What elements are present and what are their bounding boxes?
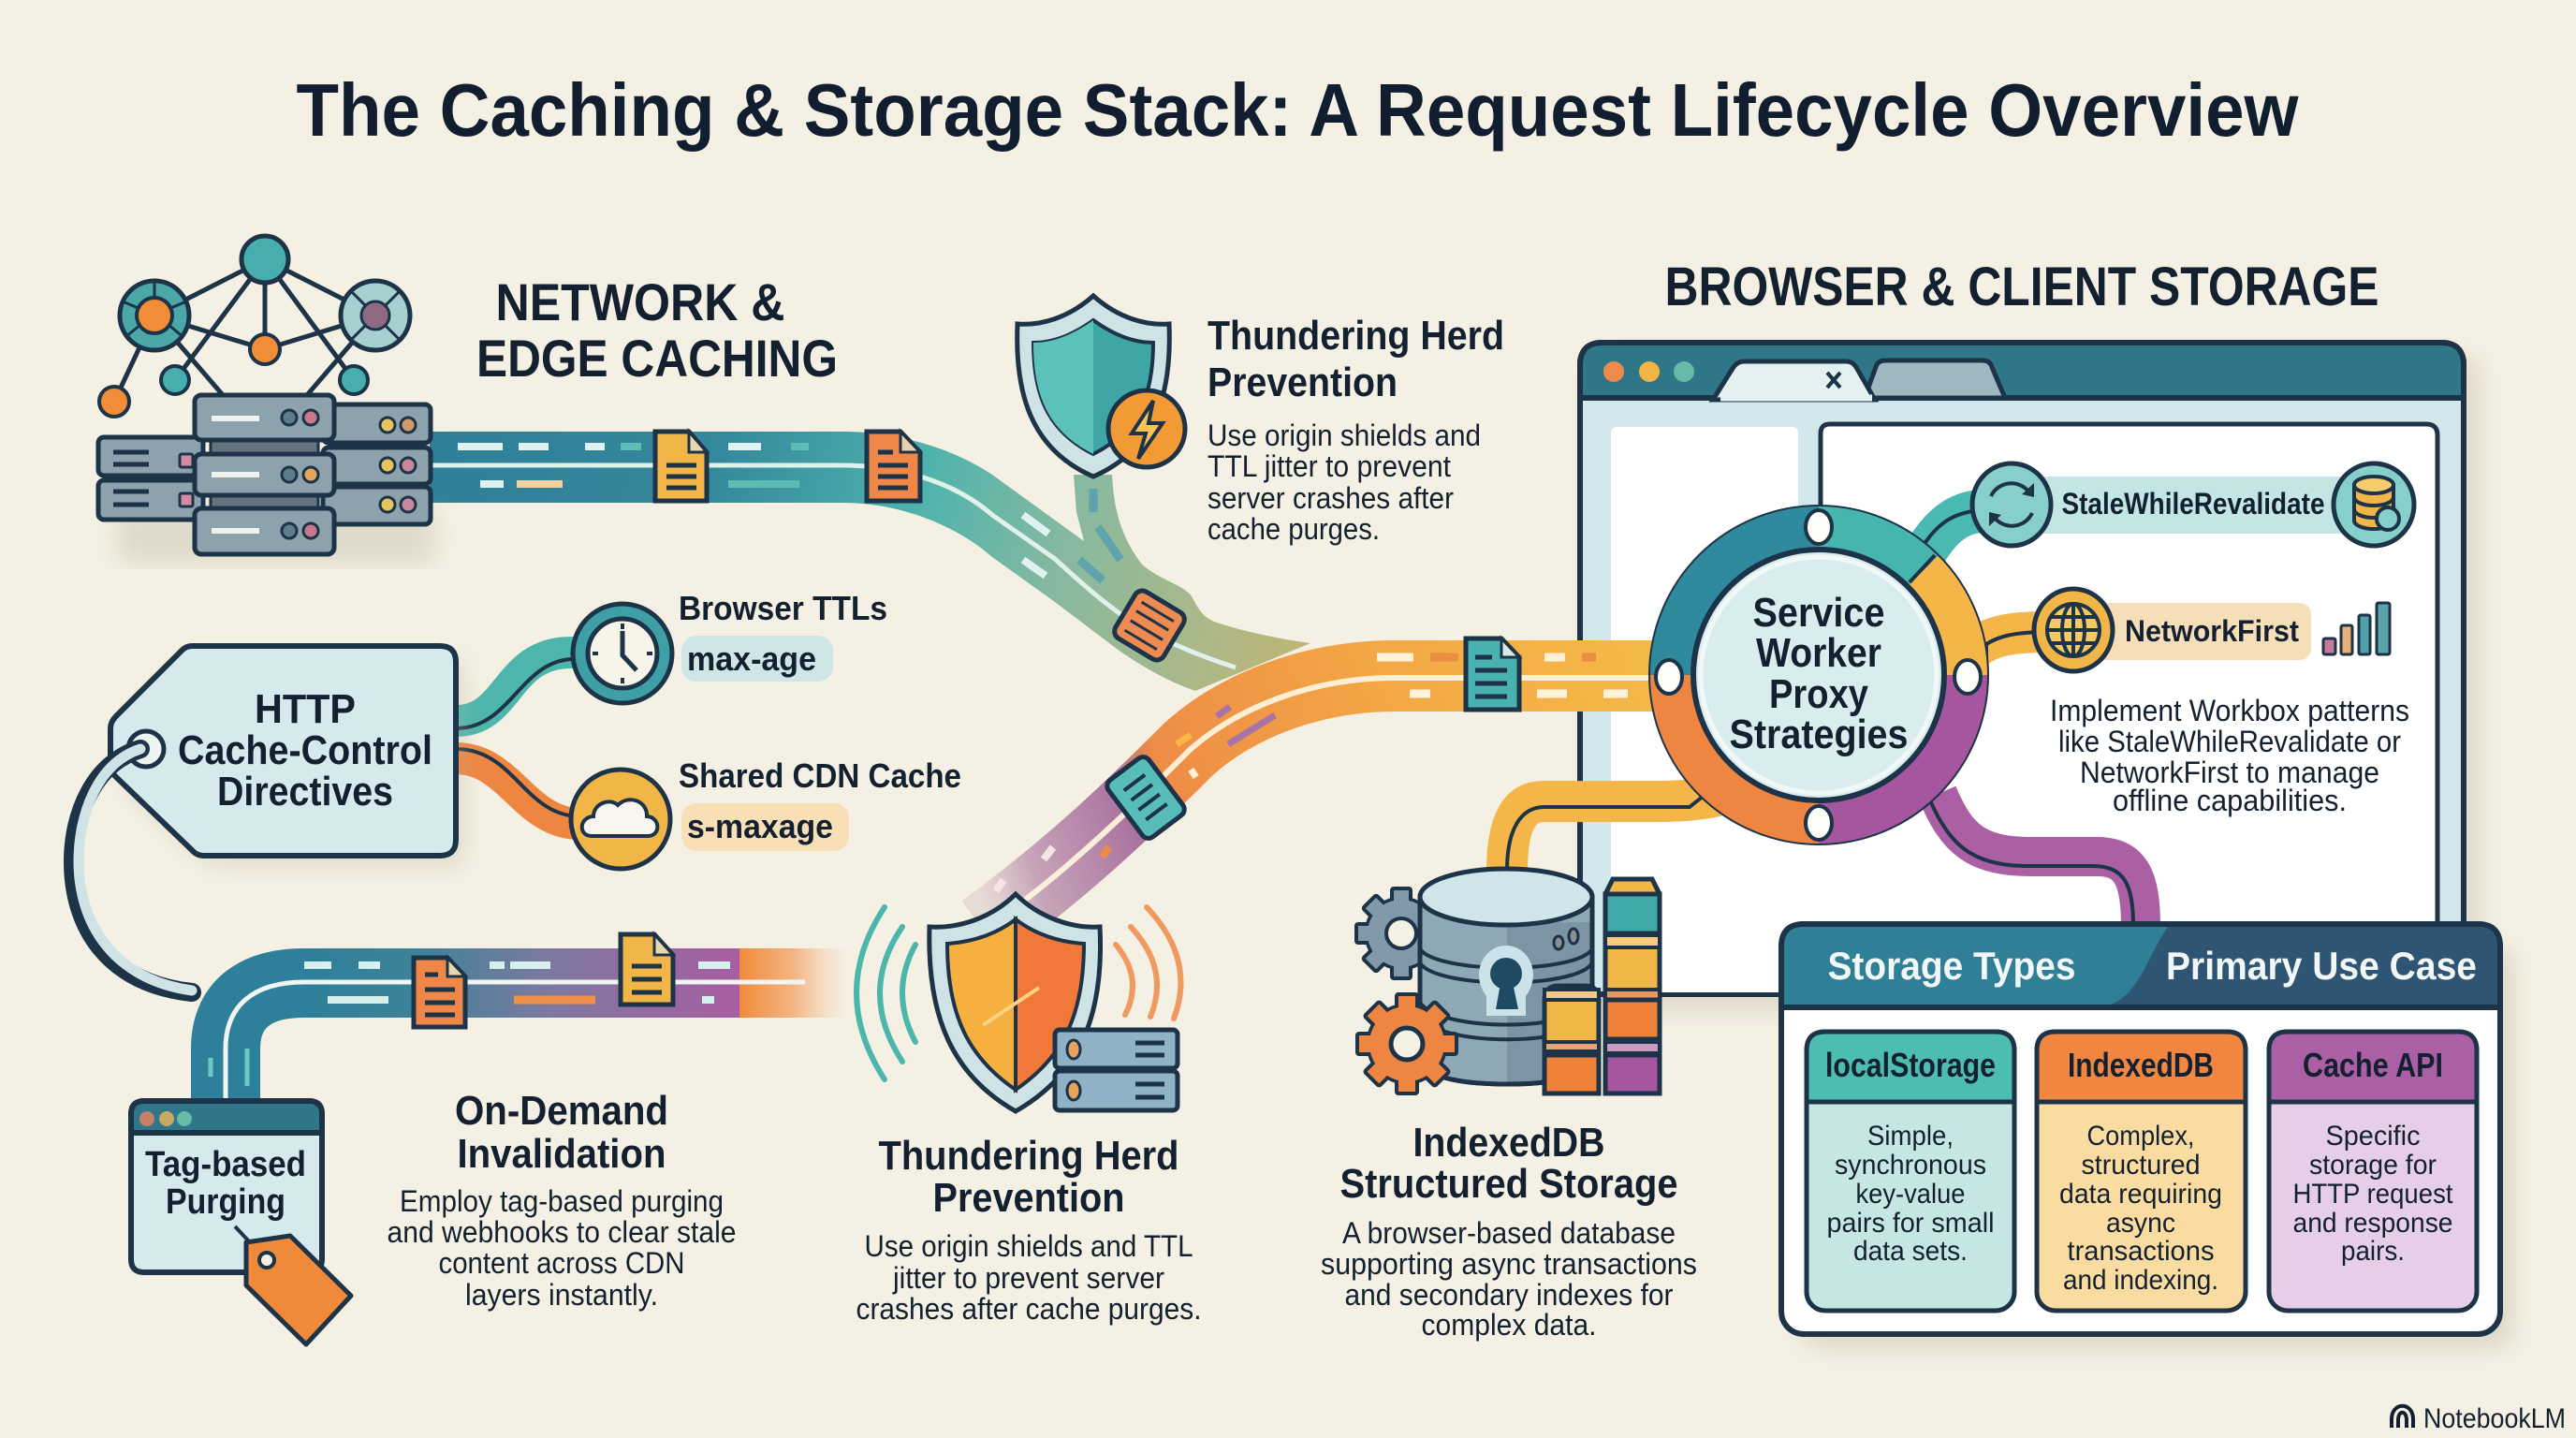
text: on-demand invalidation: Invalidation	[457, 1131, 666, 1177]
icon: orange shield with server	[856, 894, 1180, 1111]
text: indexeddb structured storage: A browser-based database	[1342, 1216, 1676, 1250]
card: IndexedDB: structured	[2082, 1150, 2200, 1181]
text: browser ttls: max-age	[687, 639, 816, 678]
connector: ring to network first	[1961, 632, 2050, 669]
card: localStorage: synchronous	[1835, 1150, 1986, 1181]
road: edge to service worker	[430, 432, 1310, 691]
icon: yellow document on purge road	[621, 934, 673, 1005]
rope from tag	[73, 749, 192, 992]
card: IndexedDB: IndexedDB	[2068, 1046, 2214, 1084]
card: localStorage: Simple,	[1867, 1121, 1954, 1152]
connector: ring to database	[1507, 785, 1718, 871]
text: on-demand invalidation: On-Demand	[455, 1088, 668, 1134]
text: thundering herd prevention (top): TTL jitter to prevent	[1208, 449, 1451, 483]
icon: signal bars	[2323, 603, 2390, 654]
icon: teal shield with bolt	[1017, 296, 1185, 477]
strategy: network first: NetworkFirst	[2125, 614, 2299, 648]
text: thundering herd prevention (top): server crashes after	[1208, 481, 1454, 515]
card: Cache API	[2269, 1032, 2477, 1311]
icon: yellow document on edge road	[655, 432, 707, 501]
icon: orange document on curved road	[1111, 588, 1188, 663]
panel: http cache-control tag: Cache-Control	[178, 727, 432, 773]
icon: orange document on purge road	[414, 958, 465, 1027]
card: IndexedDB: async	[2106, 1208, 2175, 1239]
panel: tag-based purging window: Tag-based	[145, 1145, 306, 1184]
card: IndexedDB: and indexing.	[2063, 1265, 2218, 1296]
heading: browser and client storage: BROWSER & CLIENT STORAGE	[1664, 257, 2379, 317]
card: Cache API: Cache API	[2303, 1046, 2443, 1084]
card: Cache API: and response	[2293, 1208, 2452, 1239]
icon: small server	[1055, 1030, 1178, 1110]
strategy: stale while revalidate	[1972, 463, 2414, 546]
text: thundering herd prevention (top): Use origin shields and	[1208, 418, 1481, 452]
text: thundering herd prevention (top): Prevention	[1208, 360, 1398, 405]
text: thundering herd prevention (top): Thundering Herd	[1208, 313, 1504, 359]
text: indexeddb structured storage: and secondary indexes for	[1344, 1278, 1674, 1312]
card: localStorage: key-value	[1855, 1179, 1966, 1210]
text: on-demand invalidation: content across CDN	[438, 1246, 685, 1280]
icon: teal document on diagonal road	[1105, 754, 1187, 842]
icon: server stack	[98, 395, 435, 564]
icon: network nodes	[99, 236, 410, 417]
text: shared cdn cache: Shared CDN Cache	[679, 756, 961, 795]
text: indexeddb structured storage: supporting async transactions	[1321, 1247, 1697, 1281]
text: browser ttls: Browser TTLs	[679, 589, 887, 627]
card: Cache API: HTTP request	[2293, 1179, 2453, 1210]
text: indexeddb structured storage: IndexedDB	[1413, 1120, 1604, 1166]
waves	[856, 907, 1180, 1079]
connector: tag to browser ttls	[456, 653, 585, 728]
text: browser ttls	[679, 589, 887, 682]
text: service worker proxy strategies: Worker	[1756, 630, 1881, 676]
text: service worker proxy strategies: Strategies	[1730, 712, 1908, 757]
road: service worker inbound	[983, 657, 1661, 930]
text: workbox description: NetworkFirst to manage	[2080, 756, 2379, 789]
icon: clock	[573, 604, 672, 703]
icon: orange document on edge road	[867, 432, 920, 501]
text: service worker proxy strategies: Proxy	[1769, 671, 1868, 717]
text: on-demand invalidation: layers instantly.	[465, 1278, 658, 1312]
orange gear	[1357, 994, 1456, 1093]
panel: storage types table	[1781, 924, 2513, 1348]
text: shared cdn cache	[679, 756, 961, 851]
text: thundering herd prevention (bottom): Thundering Herd	[878, 1133, 1179, 1179]
text: thundering herd prevention (bottom)	[856, 1133, 1202, 1326]
panel: http cache-control tag: HTTP	[255, 686, 356, 732]
panel: storage types table: Storage Types	[1827, 944, 2076, 988]
icon: cloud	[571, 770, 670, 869]
card: IndexedDB	[2037, 1032, 2246, 1311]
icon: teal document on inbound road	[1466, 638, 1519, 710]
strategy: stale while revalidate: StaleWhileRevalidate	[2061, 487, 2325, 521]
card: IndexedDB: Complex,	[2087, 1121, 2194, 1152]
text: indexeddb structured storage: Structured Storage	[1340, 1161, 1677, 1207]
panel: http cache-control tag	[110, 646, 463, 866]
strategy: network first	[2034, 589, 2390, 671]
text: on-demand invalidation: Employ tag-based purging	[400, 1184, 724, 1218]
text: indexeddb structured storage: complex data.	[1421, 1308, 1597, 1342]
card: Cache API: pairs.	[2341, 1236, 2405, 1267]
text: on-demand invalidation: and webhooks to clear stale	[388, 1215, 736, 1249]
icon: globe	[2034, 589, 2113, 671]
text: thundering herd prevention (bottom): crashes after cache purges.	[856, 1292, 1202, 1326]
text: indexeddb structured storage	[1321, 1120, 1697, 1342]
road: purge	[211, 948, 848, 1103]
text: thundering herd prevention (top)	[1208, 313, 1504, 546]
text: thundering herd prevention (bottom): Use origin shields and TTL	[865, 1229, 1193, 1263]
card: Cache API: storage for	[2309, 1150, 2437, 1181]
card: IndexedDB: data requiring	[2059, 1179, 2222, 1210]
panel: browser window	[1580, 343, 2481, 1011]
service worker ring	[1648, 505, 1989, 845]
gray gear	[1356, 888, 1446, 978]
text: thundering herd prevention (top): cache purges.	[1208, 512, 1380, 546]
text: thundering herd prevention (bottom): Prevention	[932, 1175, 1125, 1221]
card: localStorage: pairs for small	[1827, 1208, 1994, 1239]
card: localStorage: data sets.	[1853, 1236, 1968, 1267]
heading: network and edge caching	[476, 272, 838, 388]
panel: tag-based purging window: Purging	[166, 1182, 285, 1222]
title: The Caching & Storage Stack: A Request Lifecycle Overview	[296, 68, 2299, 152]
text: on-demand invalidation	[388, 1088, 736, 1312]
card: IndexedDB: transactions	[2067, 1236, 2215, 1267]
connector: ring to stale while revalidate	[1910, 510, 1984, 582]
connector: tag to shared cdn cache	[456, 749, 590, 824]
color blocks	[1544, 879, 1660, 1093]
heading: network and edge caching: EDGE CACHING	[476, 329, 838, 388]
card: localStorage	[1807, 1032, 2014, 1311]
text: service worker proxy strategies	[1730, 590, 1908, 757]
icon: database with gears and blocks	[1356, 869, 1660, 1093]
text: workbox description	[2050, 694, 2409, 817]
icon: database coins	[2334, 463, 2414, 546]
card: Cache API: Specific	[2325, 1121, 2421, 1152]
text: workbox description: offline capabilities.	[2113, 784, 2347, 817]
heading: network and edge caching: NETWORK &	[496, 272, 784, 331]
icon: orange price tag	[235, 1226, 351, 1344]
text: thundering herd prevention (bottom): jitter to prevent server	[892, 1261, 1164, 1295]
panel: tag-based purging window	[131, 1101, 322, 1272]
panel: storage types table: Primary Use Case	[2166, 944, 2477, 988]
panel: http cache-control tag: Directives	[217, 769, 393, 814]
text: workbox description: Implement Workbox patterns	[2050, 694, 2409, 727]
text: shared cdn cache: s-maxage	[687, 807, 833, 845]
card: localStorage: localStorage	[1825, 1046, 1996, 1084]
text: workbox description: like StaleWhileRevalidate or	[2058, 725, 2401, 758]
connector: ring to storage panel	[1930, 794, 2141, 927]
icon: refresh	[1972, 463, 2051, 546]
text: service worker proxy strategies: Service	[1752, 590, 1885, 636]
